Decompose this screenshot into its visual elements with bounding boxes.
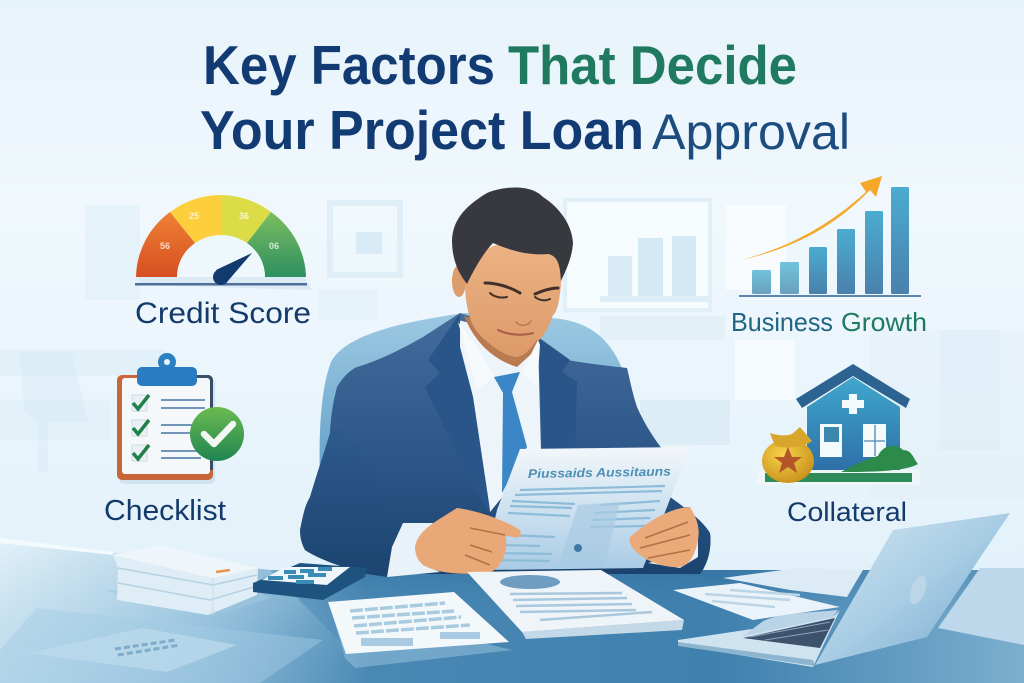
title	[200, 34, 850, 161]
label: business growth	[731, 307, 927, 337]
document held by businessman	[483, 447, 690, 570]
icon: credit score gauge: 25	[189, 211, 199, 221]
businessman	[300, 188, 710, 577]
faded papers lower left	[0, 608, 323, 683]
icon: credit score gauge	[135, 195, 312, 290]
stack of papers	[105, 545, 270, 618]
collar	[458, 322, 540, 390]
icon: credit score gauge: 06	[269, 241, 279, 251]
side papers	[673, 568, 863, 620]
title: Key Factors	[203, 34, 495, 96]
calculator	[253, 563, 367, 600]
right hand	[630, 507, 699, 567]
label: collateral: Collateral	[787, 497, 907, 527]
title: Your Project Loan	[200, 99, 644, 161]
report document	[467, 570, 684, 639]
right cuff	[648, 537, 698, 568]
icon: collateral house and money bag	[757, 364, 920, 485]
face	[465, 243, 562, 357]
left cuff	[387, 523, 440, 577]
document held by businessman: Piussaids Aussitauns	[528, 465, 671, 481]
left hand	[415, 508, 521, 574]
tie	[494, 372, 527, 493]
hair	[452, 188, 573, 284]
facial features	[485, 283, 558, 335]
shirt	[458, 320, 541, 512]
icon: checklist clipboard	[117, 353, 244, 484]
spreadsheet paper	[328, 592, 512, 668]
title: That Decide	[508, 34, 797, 96]
laptop	[678, 513, 1010, 667]
title: Approval	[652, 104, 850, 160]
icon: credit score gauge: 36	[239, 211, 249, 221]
label: business growth: Business	[731, 307, 833, 337]
lapels	[425, 313, 577, 510]
neck	[464, 316, 540, 367]
jacket	[300, 313, 710, 574]
desk	[0, 538, 1024, 683]
icon: credit score gauge: 56	[160, 241, 170, 251]
executive chair	[320, 313, 622, 500]
label: business growth: Growth	[841, 307, 927, 337]
sleeves	[300, 429, 710, 577]
label: checklist: Checklist	[104, 495, 226, 527]
icon: business growth chart	[739, 176, 921, 297]
ear	[452, 265, 466, 297]
label: credit score: Credit Score	[135, 297, 311, 330]
